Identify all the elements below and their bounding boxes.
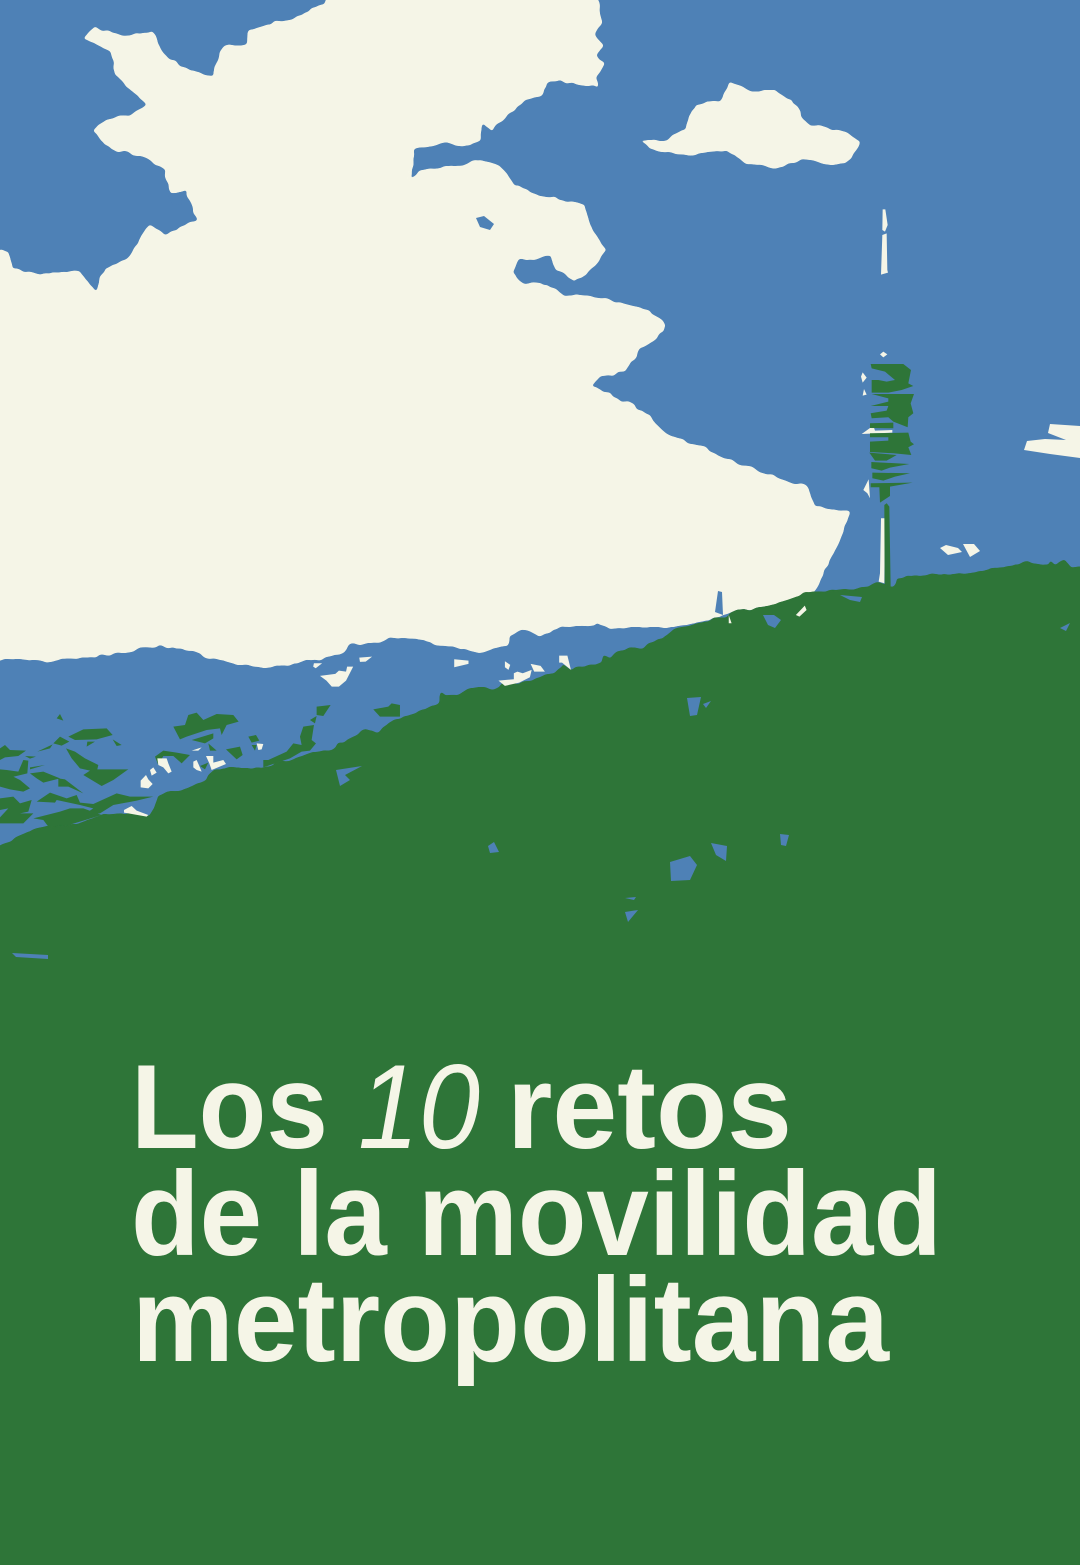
title word: retos: retos [507,1040,792,1174]
title line: de la movilidad: de la movilidad [131,1147,942,1281]
title word: Los: Los [131,1040,328,1174]
title [131,1040,942,1387]
antenna tower [861,209,914,587]
antenna highlights [861,209,892,583]
cream specks lower left [124,743,263,817]
small cloud wisps above hill [940,544,980,557]
green blotches left [0,703,400,833]
sky background [0,0,1080,900]
antenna structure [869,364,914,587]
cream specks along the ridge [313,606,807,687]
right edge cloud [1024,424,1080,458]
blue hole in large cloud [168,192,723,615]
title number: 10: 10 [358,1040,480,1174]
green hill [0,560,1080,1565]
title line: metropolitana: metropolitana [132,1253,890,1387]
large cloud [0,0,852,667]
small cloud [640,82,862,168]
blue specks on hill [12,595,1070,959]
